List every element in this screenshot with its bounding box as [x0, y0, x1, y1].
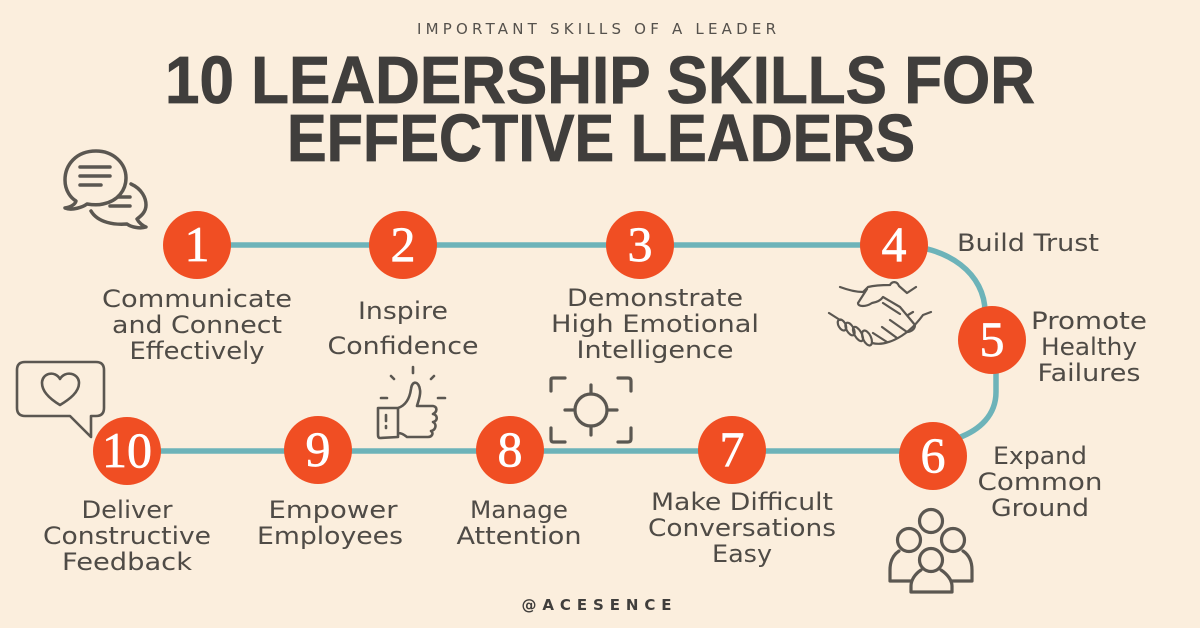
- step 7: [648, 416, 836, 568]
- step 8: 8: [498, 421, 522, 477]
- step 1: [102, 211, 292, 365]
- eyebrow heading: IMPORTANT SKILLS OF A LEADER: [417, 20, 776, 38]
- title: 10 LEADERSHIP SKILLS FOR: [165, 43, 1035, 118]
- step 2: 2: [390, 216, 416, 272]
- icon: thumbs up: [378, 367, 445, 438]
- step 5: 5: [980, 311, 1004, 367]
- step 5: Failures: [1038, 359, 1140, 387]
- connector path: [127, 245, 996, 451]
- title: [165, 43, 1035, 176]
- step 4: 4: [882, 216, 906, 272]
- step 6: 6: [920, 427, 946, 483]
- icon: handshake: [829, 282, 931, 347]
- step 4: [860, 211, 1099, 279]
- step 9: [257, 416, 403, 550]
- step 7: Make Difficult: [651, 488, 833, 516]
- step 2: Confidence: [328, 332, 478, 360]
- step 5: Healthy: [1041, 333, 1137, 361]
- footer handle: @ACESENCE: [522, 596, 672, 614]
- step 10: Feedback: [62, 548, 192, 576]
- step 10: Constructive: [43, 522, 211, 550]
- step 3: Intelligence: [576, 336, 734, 364]
- step 3: Demonstrate: [567, 284, 743, 312]
- step 9: Empower: [268, 496, 398, 524]
- icon: focus target: [551, 378, 631, 442]
- step 1: Effectively: [130, 337, 264, 365]
- step 3: 3: [628, 216, 652, 272]
- step 6: [899, 422, 1102, 522]
- step 6: Expand: [993, 442, 1087, 470]
- title: EFFECTIVE LEADERS: [287, 101, 915, 176]
- step 9: Employees: [257, 522, 403, 550]
- step 2: Inspire: [358, 297, 448, 325]
- step 6: Ground: [991, 494, 1089, 522]
- step 10: [43, 417, 211, 576]
- step 6: Common: [978, 468, 1102, 496]
- step 8: Attention: [456, 522, 582, 550]
- step 7: Conversations: [648, 514, 836, 542]
- icon: speech bubbles: [65, 151, 146, 228]
- step 7: Easy: [712, 540, 772, 568]
- step 3: [551, 211, 759, 364]
- icon: people group: [890, 510, 972, 592]
- step 8: [456, 416, 582, 550]
- step 10: Deliver: [82, 496, 173, 524]
- step 10: 10: [102, 422, 152, 478]
- step 9: 9: [306, 421, 330, 477]
- step 1: Communicate: [102, 285, 292, 313]
- step 1: and Connect: [112, 311, 282, 339]
- step 1: 1: [184, 216, 210, 272]
- step 3: High Emotional: [551, 310, 759, 338]
- step 5: Promote: [1031, 307, 1147, 335]
- step 2: [328, 211, 478, 360]
- step 7: 7: [720, 421, 744, 477]
- icon: heart speech bubble: [17, 362, 104, 437]
- step 5: [958, 306, 1147, 387]
- step 8: Manage: [470, 496, 568, 524]
- step 4: Build Trust: [957, 229, 1099, 257]
